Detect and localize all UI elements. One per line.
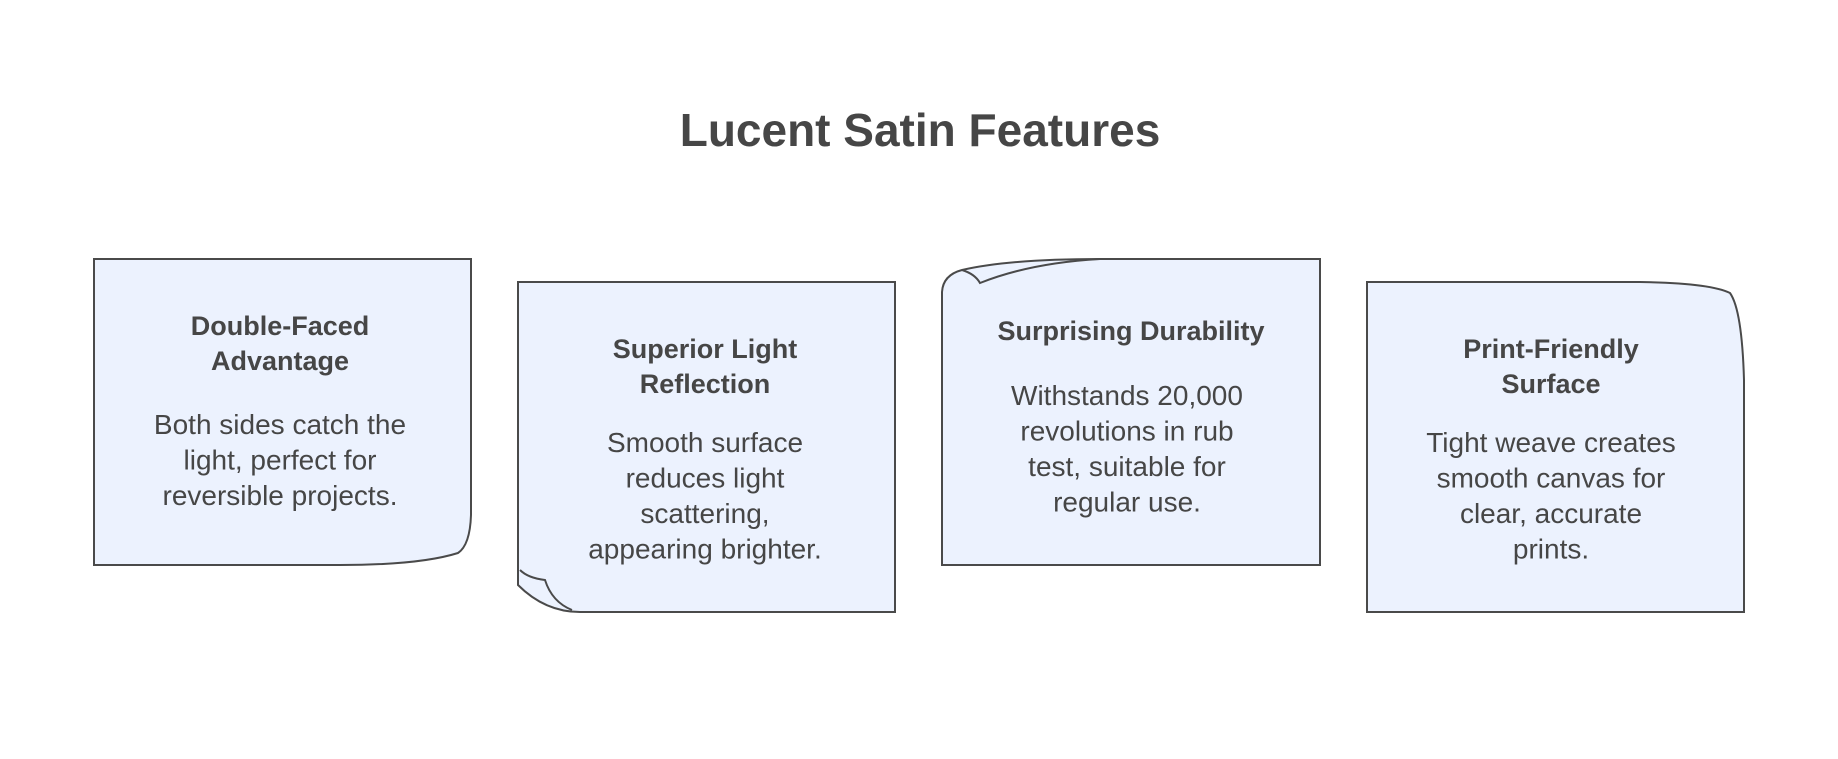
text: light reflection: scattering, [640, 498, 770, 529]
heading: light reflection: Superior Light [613, 334, 797, 364]
text: durability: Withstands 20,000 [1011, 380, 1243, 411]
text: durability: revolutions in rub [1020, 416, 1234, 446]
text: light reflection: Smooth surface [607, 427, 803, 458]
heading: durability: Surprising Durability [997, 316, 1265, 346]
text: print-friendly: clear, accurate [1460, 498, 1642, 529]
text: light reflection: appearing brighter. [588, 534, 822, 564]
panel: print-friendly surface [1367, 282, 1744, 612]
text: print-friendly: smooth canvas for [1437, 462, 1665, 494]
text: print-friendly: Tight weave creates [1426, 427, 1676, 458]
text: light reflection: reduces light [626, 462, 785, 494]
title: Lucent Satin Features [680, 104, 1160, 156]
heading: light reflection: Reflection [640, 369, 770, 399]
panel: double-faced advantage [94, 259, 471, 565]
heading: double-faced: Double-Faced [191, 311, 369, 341]
text: durability: test, suitable for [1028, 451, 1226, 482]
text: double-faced: reversible projects. [163, 480, 397, 511]
text: durability: regular use. [1053, 486, 1201, 518]
panel: surprising durability [942, 259, 1320, 565]
panel: superior light reflection [518, 282, 895, 612]
heading: print-friendly: Surface [1501, 369, 1601, 399]
text: double-faced: Both sides catch the [154, 409, 406, 440]
text: double-faced: light, perfect for [184, 444, 376, 476]
text: print-friendly: prints. [1513, 534, 1589, 564]
heading: print-friendly: Print-Friendly [1463, 334, 1639, 364]
heading: double-faced: Advantage [211, 346, 349, 376]
